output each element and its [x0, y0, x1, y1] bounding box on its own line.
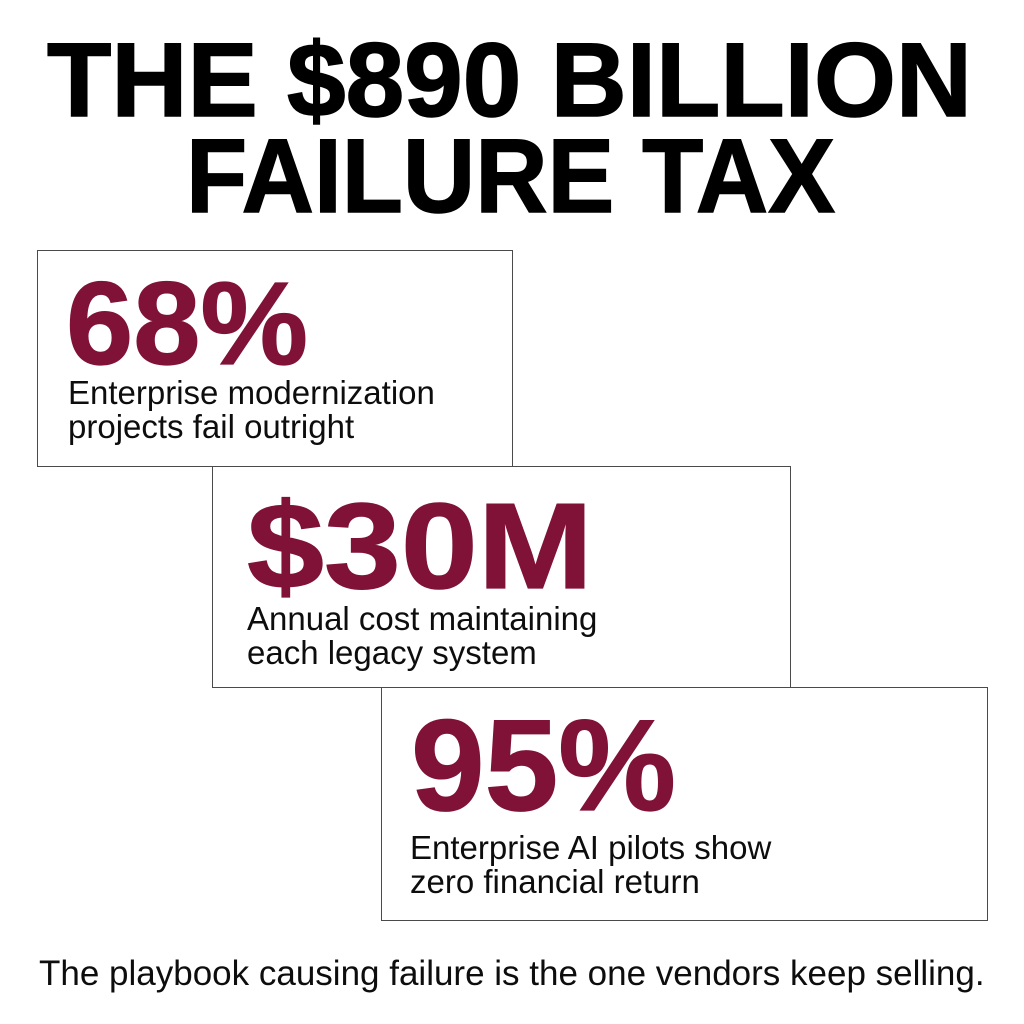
- stat description: AI pilots: zero financial return: [410, 863, 700, 900]
- panel: 95% stat: [381, 687, 988, 921]
- title: [47, 22, 972, 235]
- stat description: legacy cost: each legacy system: [247, 634, 537, 671]
- stat description: AI pilots: [410, 829, 772, 900]
- stat description: legacy cost: [247, 600, 597, 671]
- stat description: modernization: Enterprise modernization: [68, 374, 435, 411]
- stat value: 68%: 68%: [66, 258, 308, 390]
- stat value: $30M: $30M: [247, 478, 593, 614]
- title: FAILURE TAX: [186, 118, 835, 235]
- stat description: modernization: projects fail outright: [68, 408, 354, 445]
- stat description: AI pilots: Enterprise AI pilots show: [410, 829, 771, 866]
- stat description: modernization: [68, 374, 435, 445]
- footer statement: The playbook causing failure is the one vendors keep selling.: [39, 954, 985, 993]
- panel: $30M stat: [212, 466, 791, 688]
- stat value: 95%: 95%: [411, 692, 676, 838]
- stat description: legacy cost: Annual cost maintaining: [247, 600, 597, 637]
- title: THE $890 BILLION: [47, 22, 972, 139]
- panel: 68% stat: [37, 250, 513, 467]
